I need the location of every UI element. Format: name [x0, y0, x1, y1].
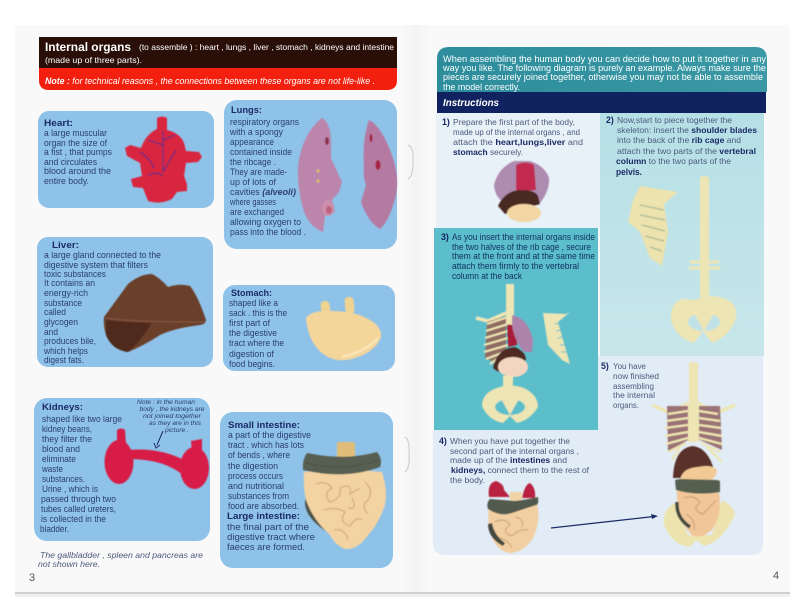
step 4 text: 4) — [439, 436, 447, 446]
instructions heading bar — [437, 92, 766, 113]
header: internal organs: (made up of three parts). — [45, 55, 142, 65]
panel: small and large intestine: the final part of the — [227, 522, 309, 532]
panel: small and large intestine: digestive tract where — [227, 532, 315, 542]
panel: small and large intestine: Large intestine: — [227, 511, 300, 522]
image: intestines with kidneys — [487, 481, 538, 553]
page number 4: 4 — [773, 570, 779, 582]
panel: kidneys: is collected in the — [41, 514, 106, 524]
panel: liver: Liver: — [52, 240, 79, 251]
bottom panel: steps 4 and 5 — [433, 356, 763, 555]
step 5 text: the internal — [613, 390, 655, 400]
note: kidneys are not joined: picture . — [164, 427, 189, 434]
panel: kidneys: they filter the — [42, 434, 92, 444]
panel: small and large intestine: tract . which has lots — [228, 440, 305, 450]
panel: small and large intestine: a part of the digestive — [228, 430, 311, 440]
intro text band: When assembling the human body you can decide how to put it together in any — [443, 54, 767, 64]
panel: heart: entire body. — [44, 176, 89, 186]
step 1 panel: stomach securely. — [453, 147, 523, 157]
step 3 panel — [434, 228, 598, 430]
panel: small and large intestine: food are absorbed. — [228, 501, 299, 511]
step 1 panel — [436, 113, 600, 228]
panel: stomach: first part of — [229, 318, 271, 328]
note: kidneys are not joined — [137, 399, 205, 434]
header: internal organs: (to assemble ) : heart , lungs , liver , stomach , kidneys and intestine — [139, 42, 394, 52]
panel: heart: blood around the — [44, 166, 111, 176]
step 3 panel: 3) — [441, 232, 449, 242]
panel: stomach — [223, 285, 395, 371]
step 2 panel: into the back of the rib cage and — [617, 135, 741, 145]
step 5 text: You have — [613, 361, 646, 371]
icon: kidneys model — [104, 428, 209, 489]
icon: heart model — [125, 116, 202, 203]
panel: small and large intestine: Small intestine: — [228, 420, 300, 431]
panel: liver: energy-rich — [44, 288, 88, 298]
panel: stomach: shaped like a — [229, 298, 278, 308]
step 5 text: organs. — [613, 400, 639, 410]
step 2 panel: 2) — [606, 115, 614, 125]
step 2 panel: skeleton: insert the shoulder blades — [617, 125, 757, 135]
panel: lungs — [224, 100, 397, 249]
panel: kidneys: tubes called ureters, — [41, 504, 116, 514]
panel: kidneys: blood and — [42, 444, 80, 454]
step 5 text — [601, 361, 659, 410]
page number 3: 3 — [29, 572, 35, 584]
step 2 panel: Now,start to piece together the — [617, 115, 732, 125]
step 4 text: made up of the intestines and — [450, 455, 567, 465]
panel: lungs: They are made- — [230, 167, 287, 177]
panel: lungs: cavities (alveoli) — [230, 187, 296, 197]
intro text band: the model correctly. — [443, 82, 520, 92]
panel: liver: glycogen — [44, 317, 78, 327]
panel: liver: digestive system that filters — [44, 260, 149, 270]
panel: small and large intestine: process occurs — [228, 471, 284, 481]
panel: liver: which helps — [43, 346, 89, 356]
panel: small and large intestine: the digestion — [228, 461, 278, 471]
panel: small and large intestine: of bends , where — [228, 450, 290, 460]
instructions heading bar: Instructions — [443, 97, 499, 109]
panel: lungs: contained inside — [230, 147, 292, 157]
header: internal organs: Note : for technical reasons , the connections between these organs are not life-like . — [45, 76, 375, 86]
panel: small and large intestine: substances from — [228, 491, 289, 501]
panel: lungs: allowing oxygen to — [230, 217, 301, 227]
panel: kidneys: Urine , which is — [42, 484, 99, 494]
panel: heart: organ the size of — [44, 138, 108, 148]
step 2 panel: attach the two parts of the vertebral — [617, 146, 756, 156]
panel: lungs: where gasses — [229, 197, 277, 207]
right page: instructions — [433, 47, 779, 582]
gallbladder note: not shown here. — [38, 559, 100, 569]
panel: kidneys: eliminate — [42, 454, 76, 464]
panel: liver: produces bile, — [44, 336, 96, 346]
header: internal organs — [39, 37, 397, 90]
image: second rib cage half — [543, 312, 570, 364]
note: kidneys are not joined: as they are in this — [149, 420, 202, 427]
step 2 panel — [600, 113, 764, 356]
panel: kidneys: waste — [41, 464, 63, 474]
icon: stomach model — [306, 297, 381, 360]
panel: lungs: respiratory organs — [230, 117, 300, 127]
step 1 panel: 1) — [442, 117, 450, 127]
panel: kidneys: shaped like two large — [42, 414, 122, 424]
step 5 text: assembling — [613, 381, 654, 391]
step 2 panel: pelvis. — [616, 167, 642, 177]
panel: liver: substance — [44, 298, 82, 308]
panel: kidneys — [34, 398, 210, 541]
panel: liver: digest fats. — [44, 355, 84, 365]
panel: lungs: are exchanged — [230, 207, 284, 217]
arrow: step 4 to body — [551, 514, 658, 528]
header: internal organs: Internal organs — [45, 42, 131, 54]
step 4 text — [439, 436, 590, 485]
stitch: top staple — [408, 145, 413, 179]
panel: stomach: the digestive — [229, 328, 277, 338]
intro text band: way you like. The following diagram is purely an example. Always make sure the — [442, 63, 766, 73]
panel: stomach: Stomach: — [231, 288, 272, 299]
panel: lungs: Lungs: — [231, 105, 262, 116]
panel: lungs: up of lots of — [230, 177, 277, 187]
panel: small and large intestine — [220, 412, 393, 568]
intro text band: pieces are securely joined together, otherwise you may not be able to assemble — [443, 72, 763, 82]
gallbladder note: The gallbladder , spleen and pancreas are — [40, 550, 203, 560]
stitch: bottom staple — [405, 437, 409, 472]
step 3 panel: attach them firmly to the vertebral — [452, 261, 579, 271]
image: vertebral column and pelvis — [671, 176, 736, 343]
panel: lungs: with a spongy — [229, 127, 284, 137]
panel: stomach: sack . this is the — [229, 308, 287, 318]
note: kidneys are not joined: not joined together — [143, 413, 202, 420]
panel: stomach: tract where the — [229, 338, 284, 348]
panel: kidneys: passed through two — [41, 494, 116, 504]
step 3 panel: column at the back — [452, 271, 523, 281]
panel: heart — [38, 111, 214, 208]
icon: liver model — [104, 274, 206, 352]
panel: heart: a fist , that pumps — [44, 147, 113, 157]
step 4 text: When you have put together the — [450, 436, 570, 446]
image: partly assembled torso — [476, 284, 538, 423]
step 4 text: kidneys, connect them to the rest of — [451, 465, 590, 475]
panel: stomach: food begins. — [229, 359, 275, 369]
panel: liver: called — [44, 307, 66, 317]
step 3 panel: them at the front and at the same time — [452, 251, 595, 261]
step 5 text: now finished — [613, 371, 659, 381]
panel: small and large intestine: and nutritional — [228, 481, 284, 491]
panel: liver: a large gland connected to the — [44, 250, 161, 260]
left page: internal organs — [29, 37, 413, 584]
icon: lungs model — [298, 118, 397, 232]
step 1 panel: Prepare the first part of the body, — [453, 117, 575, 127]
panel: lungs: the ribcage . — [230, 157, 276, 167]
panel: small and large intestine: faeces are formed. — [227, 542, 305, 552]
image: assembled upper organs — [494, 161, 549, 222]
panel: liver: and — [44, 327, 58, 337]
icon: intestines model — [303, 442, 386, 549]
step 5 text: 5) — [601, 361, 609, 371]
panel: kidneys: bladder. — [40, 524, 69, 534]
panel: stomach: digestion of — [229, 349, 275, 359]
step 1 panel: made up of the internal organs , and — [453, 127, 580, 137]
image: fully assembled model — [652, 362, 735, 547]
panel: liver: It contains an — [44, 278, 95, 288]
step 4 text: the body. — [450, 475, 485, 485]
step 1 panel: attach the heart,lungs,liver and — [453, 137, 583, 147]
panel: lungs: appearance — [230, 137, 274, 147]
panel: liver — [37, 237, 213, 367]
panel: kidneys: substances. — [42, 474, 85, 484]
note: kidneys are not joined: Note : in the human — [137, 399, 195, 406]
step 3 panel: As you insert the internal organs inside — [452, 232, 595, 242]
gallbladder note — [38, 550, 203, 569]
panel: kidneys: kidney beans, — [42, 424, 92, 434]
intro text band — [437, 47, 767, 92]
step 3 panel: the two halves of the rib cage , secure — [452, 242, 591, 252]
panel: liver: toxic substances — [44, 269, 107, 279]
panel: heart: a large muscular — [44, 128, 107, 138]
step 4 text: second part of the internal organs , — [450, 446, 579, 456]
image: rib cage half — [628, 186, 678, 266]
panel: heart: Heart: — [44, 118, 73, 129]
step 2 panel: column to the two parts of the — [616, 156, 731, 166]
panel: heart: and circulates — [44, 157, 98, 167]
panel: kidneys: Kidneys: — [42, 402, 83, 413]
panel: lungs: pass into the blood . — [230, 227, 306, 237]
arrow: to kidney connector — [154, 431, 163, 448]
note: kidneys are not joined: body , the kidneys are — [140, 406, 205, 413]
